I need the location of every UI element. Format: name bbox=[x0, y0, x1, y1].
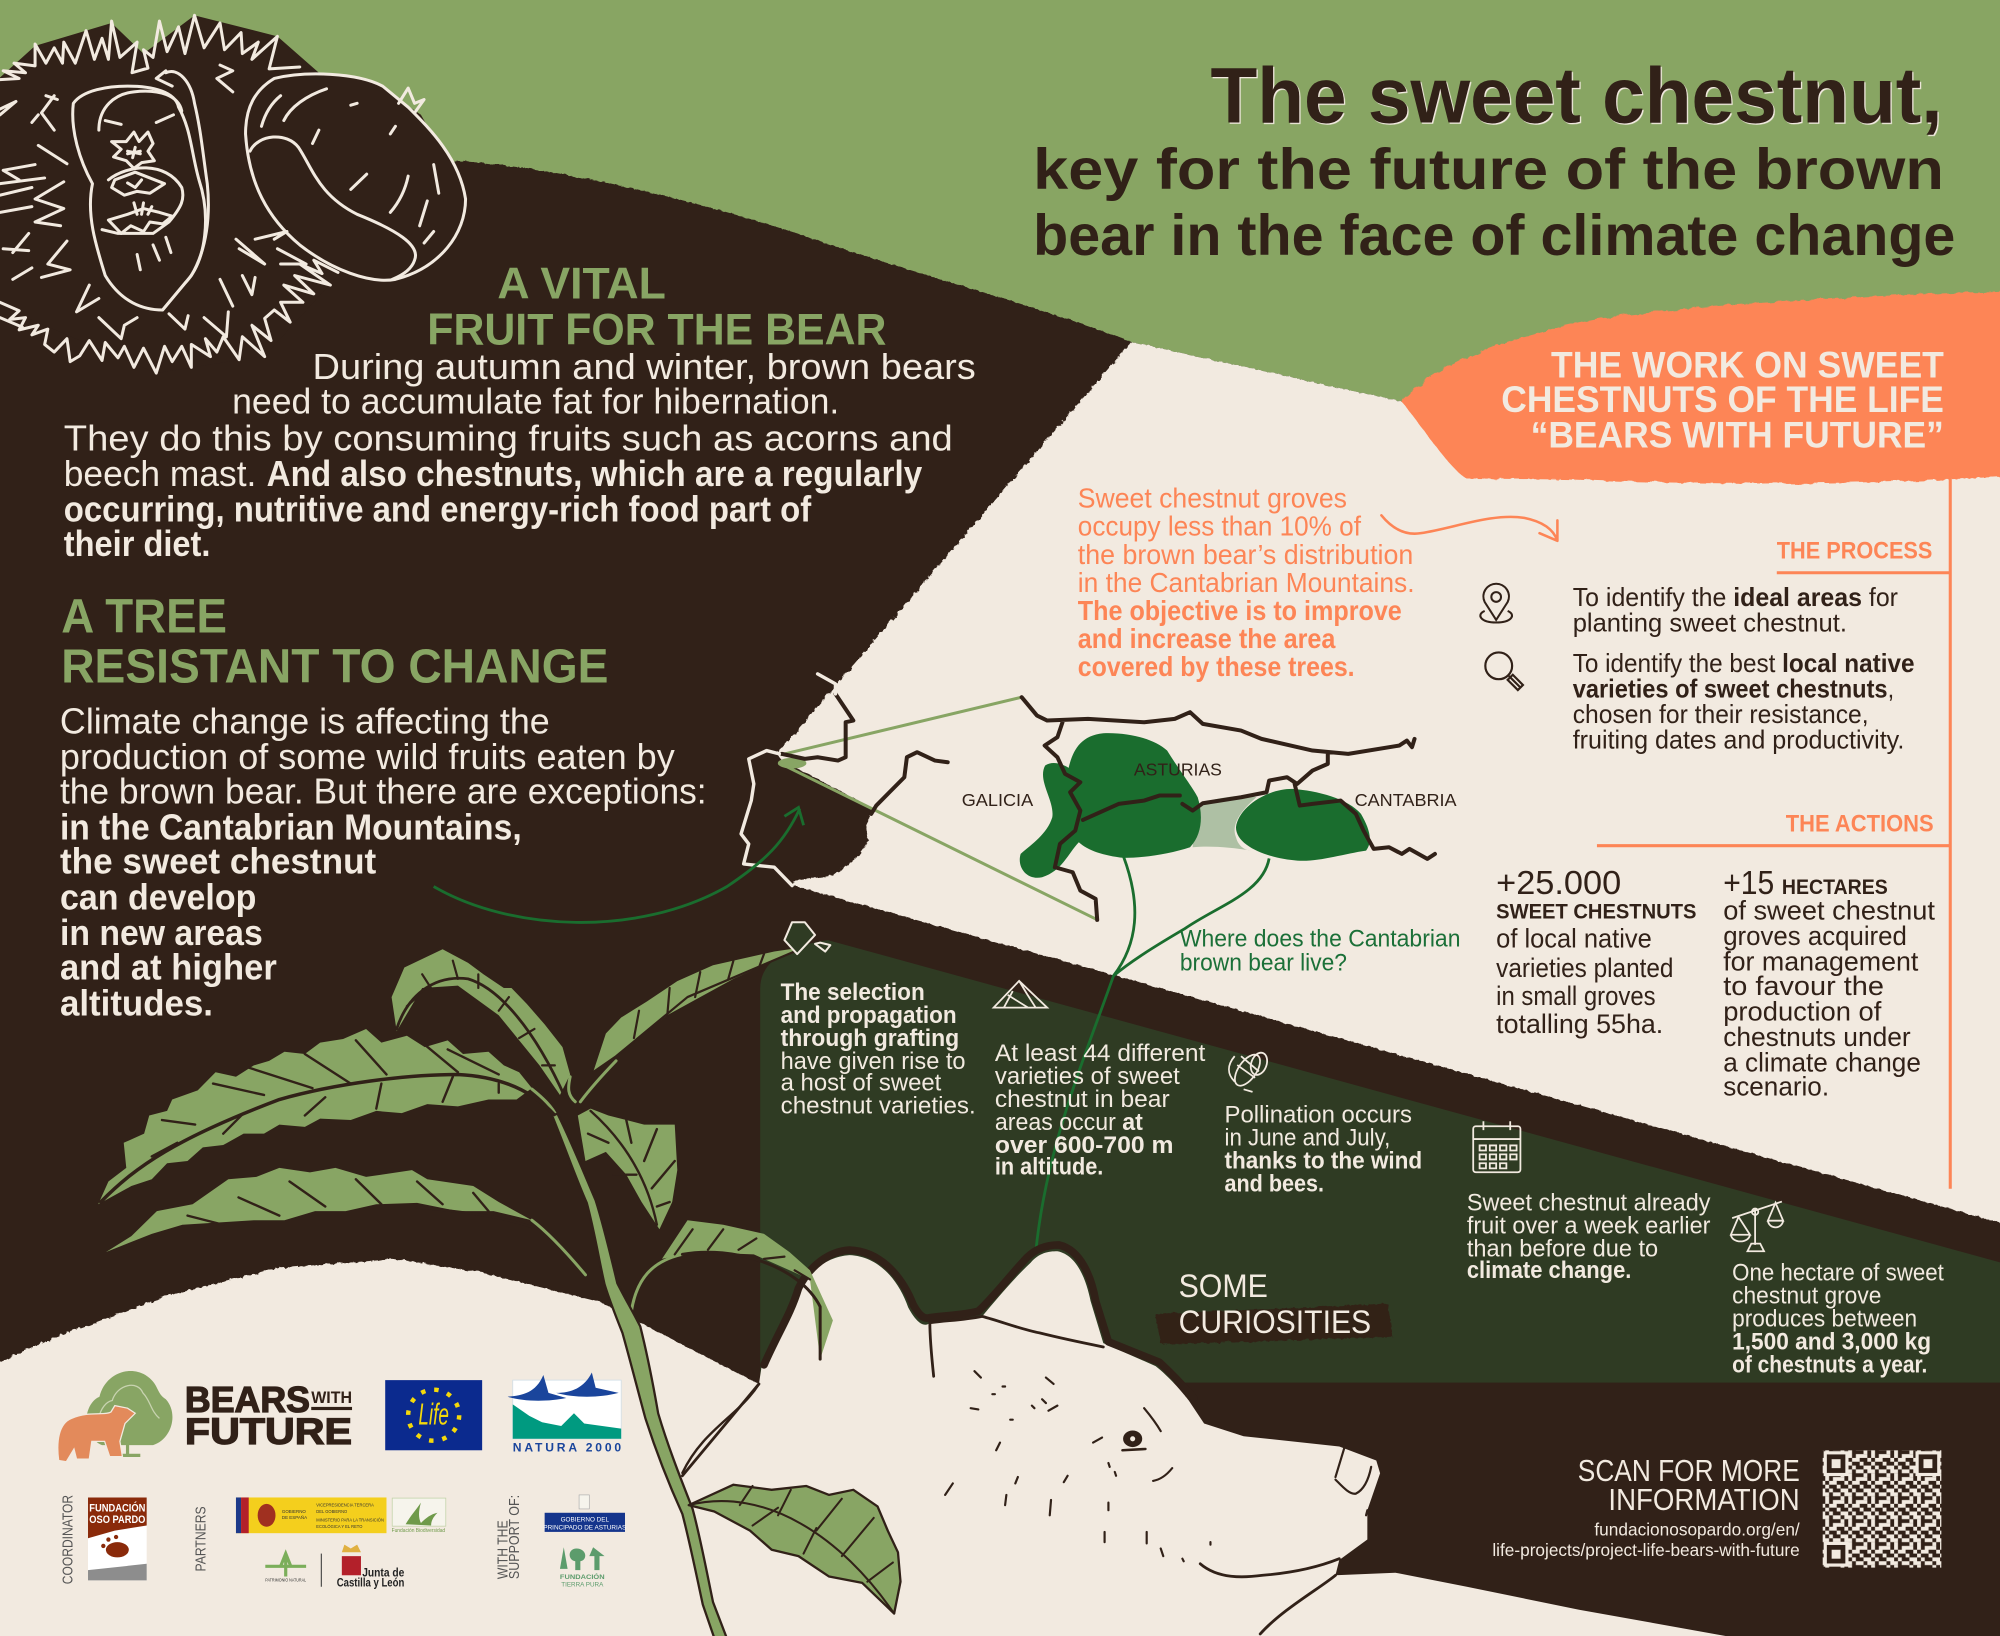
background: green top band bbox=[0, 0, 2000, 402]
heading: some curiosities: CURIOSITIES bbox=[1179, 1304, 1371, 1340]
label: coordinator: COORDINATOR bbox=[61, 1495, 77, 1584]
brush behind curiosities bbox=[1156, 1304, 1393, 1344]
heading: the process: THE PROCESS bbox=[1777, 538, 1932, 565]
heading: a tree resistant to change: A TREE bbox=[61, 590, 227, 644]
text block: selection and propagation: have given rise to bbox=[781, 1048, 966, 1075]
text block: pollination: in June and July, bbox=[1224, 1124, 1390, 1151]
illustration: bear bbox=[682, 1245, 1778, 1636]
icon: magnifying glass bbox=[1485, 652, 1523, 690]
text block: tree resistant body: in the Cantabrian Mountains, bbox=[60, 807, 522, 847]
text block: fruit a week earlier: Sweet chestnut already bbox=[1467, 1189, 1711, 1216]
heading: some curiosities bbox=[1179, 1268, 1371, 1340]
arrow: orange curve to process bbox=[1381, 515, 1557, 541]
text block: sweet chestnut groves orange: and increase the area bbox=[1078, 623, 1336, 654]
text block: process step two: chosen for their resistance, bbox=[1573, 701, 1869, 729]
text block: one hectare production bbox=[1732, 1260, 1944, 1378]
logo: fundacion tierra pura: TIERRA PURA bbox=[561, 1582, 604, 1589]
plant stem bbox=[552, 1114, 730, 1636]
text block: vital fruit body: need to accumulate fat for hibernation. bbox=[232, 381, 839, 421]
logo: fundacion biodiversidad bbox=[392, 1498, 446, 1534]
text block: vital fruit body bbox=[64, 347, 976, 564]
text block: scan for more information: INFORMATION bbox=[1608, 1483, 1800, 1517]
logo: bears with future: WITH bbox=[311, 1388, 352, 1407]
logo: patrimonio natural: PATRIMONIO NATURAL bbox=[265, 1578, 307, 1583]
leaf: lower right over bear bbox=[689, 1485, 901, 1614]
panel: orange heading blob bbox=[1402, 291, 2000, 483]
text block: sweet chestnut groves orange: The objective is to improve bbox=[1078, 595, 1402, 626]
orange rule frame bbox=[1597, 478, 1950, 1189]
text block: action 25.000 sweet chestnuts: in small groves bbox=[1496, 981, 1656, 1011]
text block: process step one: To identify the ideal areas for bbox=[1573, 584, 1898, 612]
heading: a vital fruit for the bear: A VITAL bbox=[497, 259, 666, 308]
text block: action 15 hectares: for management bbox=[1723, 947, 1919, 977]
text block: process step two: fruiting dates and productivity. bbox=[1573, 727, 1904, 755]
text block: pollination: thanks to the wind bbox=[1224, 1147, 1422, 1174]
text block: vital fruit body: During autumn and winter, brown bears bbox=[312, 347, 976, 387]
text block: one hectare production: produces between bbox=[1732, 1306, 1917, 1333]
text block: varieties and altitude: areas occur at bbox=[995, 1109, 1143, 1136]
text block: action 25.000 sweet chestnuts: varieties planted bbox=[1496, 953, 1673, 983]
logo: gobierno de espana: ECOLÓGICA Y EL RETO bbox=[316, 1524, 362, 1529]
icon: location pin bbox=[1480, 584, 1512, 622]
logo: fundacion oso pardo: FUNDACIÓN bbox=[89, 1501, 146, 1514]
qr code bbox=[1823, 1450, 1941, 1568]
text block: fruit a week earlier: than before due to bbox=[1467, 1235, 1658, 1262]
logo: fundacion tierra pura: FUNDACIÓN bbox=[560, 1572, 605, 1581]
text block: process step one bbox=[1573, 584, 1898, 637]
text block: one hectare production: 1,500 and 3,000 kg bbox=[1732, 1329, 1931, 1356]
text block: action 15 hectares: to favour the bbox=[1723, 971, 1884, 1001]
text block: action 15 hectares: production of bbox=[1723, 996, 1882, 1026]
text block: action 25.000 sweet chestnuts: of local native bbox=[1496, 924, 1652, 954]
heading: the actions: THE ACTIONS bbox=[1786, 811, 1934, 838]
heading: a vital fruit for the bear bbox=[427, 259, 886, 354]
text block: where does the bear live: Where does the Cantabrian bbox=[1180, 925, 1460, 952]
logo: natura 2000: NATURA 2000 bbox=[513, 1441, 621, 1455]
logo: gobierno de espana bbox=[236, 1497, 386, 1533]
text block: scan for more information: fundacionosopardo.org/en/ bbox=[1594, 1520, 1800, 1540]
text block: scan for more information: SCAN FOR MORE bbox=[1578, 1454, 1800, 1488]
logo: gobierno del principado de asturias: GOBIERNO DEL bbox=[561, 1517, 609, 1524]
logo: bears with future bbox=[58, 1371, 352, 1462]
text block: action 15 hectares: a climate change bbox=[1723, 1047, 1921, 1077]
text block: vital fruit body: their diet. bbox=[64, 524, 210, 564]
title: key for the future of the brown bbox=[1033, 138, 1944, 202]
label: galicia: GALICIA bbox=[962, 790, 1033, 810]
text block: varieties and altitude bbox=[995, 1040, 1206, 1181]
text block: selection and propagation: a host of sweet bbox=[781, 1070, 942, 1097]
text block: action 15 hectares bbox=[1723, 865, 1936, 1102]
map: bear distribution bbox=[741, 674, 1435, 920]
callout lines: from map to bear bbox=[1036, 857, 1269, 1253]
text block: pollination bbox=[1224, 1101, 1422, 1197]
logo: fundacion oso pardo: OSO PARDO bbox=[89, 1514, 145, 1526]
text block: process step two: To identify the best local native bbox=[1573, 650, 1915, 678]
icon: bee bbox=[1229, 1050, 1270, 1092]
text block: process step one: planting sweet chestnut. bbox=[1573, 609, 1847, 637]
text block: sweet chestnut groves orange: occupy less than 10% of bbox=[1078, 511, 1361, 542]
text block: sweet chestnut groves orange: covered by these trees. bbox=[1078, 651, 1355, 682]
text block: process step two: varieties of sweet chestnuts, bbox=[1573, 676, 1894, 704]
label: with the support of bbox=[496, 1495, 523, 1579]
heading: some curiosities: SOME bbox=[1179, 1268, 1268, 1304]
text block: tree resistant body: can develop bbox=[60, 877, 256, 917]
text block: varieties and altitude: in altitude. bbox=[995, 1154, 1103, 1181]
text block: where does the bear live: brown bear live? bbox=[1180, 950, 1347, 977]
logo: gobierno de espana: VICEPRESIDENCIA TERCERA bbox=[316, 1502, 374, 1507]
icon: watering can bbox=[784, 922, 830, 954]
text block: action 25.000 sweet chestnuts: SWEET CHESTNUTS bbox=[1496, 900, 1696, 923]
text block: varieties and altitude: At least 44 different bbox=[995, 1040, 1206, 1067]
text block: scan for more information bbox=[1492, 1454, 1800, 1560]
text block: pollination: Pollination occurs bbox=[1224, 1101, 1412, 1128]
logo: gobierno de espana: DE ESPAÑA bbox=[282, 1514, 307, 1520]
logo: junta de castilla y leon: Junta de bbox=[362, 1566, 405, 1580]
text block: selection and propagation: and propagation bbox=[781, 1002, 957, 1029]
text block: pollination: and bees. bbox=[1224, 1170, 1324, 1197]
logo: life: Life bbox=[418, 1398, 449, 1432]
logo: fundacion tierra pura bbox=[560, 1547, 605, 1589]
text block: action 15 hectares: scenario. bbox=[1723, 1072, 1829, 1102]
label: asturias: ASTURIAS bbox=[1134, 760, 1222, 780]
heading: the work on sweet chestnuts: CHESTNUTS OF THE LIFE bbox=[1501, 379, 1944, 420]
icon: calendar bbox=[1473, 1121, 1520, 1172]
text block: vital fruit body: And also chestnuts, which are a regularly bbox=[267, 454, 922, 494]
text block: action 15 hectares: of sweet chestnut bbox=[1723, 896, 1936, 926]
logo: natura 2000 bbox=[508, 1372, 621, 1455]
logo: fundacion biodiversidad: Fundación Biodiversidad bbox=[392, 1528, 445, 1534]
text block: selection and propagation: chestnut varieties. bbox=[781, 1093, 976, 1120]
title: bear in the face of climate change bbox=[1033, 204, 1955, 268]
heading: the work on sweet chestnuts: “BEARS WITH FUTURE” bbox=[1531, 415, 1944, 456]
text block: action 15 hectares: +15 bbox=[1723, 865, 1774, 902]
text block: tree resistant body: Climate change is affecting the bbox=[60, 701, 550, 741]
text block: action 15 hectares: HECTARES bbox=[1782, 876, 1888, 899]
text block: selection and propagation bbox=[781, 979, 976, 1120]
text block: action 25.000 sweet chestnuts bbox=[1496, 865, 1696, 1039]
text block: fruit a week earlier bbox=[1467, 1189, 1711, 1284]
text block: process step two bbox=[1573, 650, 1915, 755]
heading: the work on sweet chestnuts bbox=[1501, 345, 1944, 456]
text block: one hectare production: chestnut grove bbox=[1732, 1283, 1881, 1310]
text block: tree resistant body: the sweet chestnut bbox=[60, 842, 376, 882]
illustration: chestnut burr and nut bbox=[0, 15, 469, 373]
text block: varieties and altitude: over 600-700 m bbox=[995, 1132, 1173, 1159]
text block: selection and propagation: The selection bbox=[781, 979, 925, 1006]
text block: tree resistant body: production of some wild fruits eaten by bbox=[60, 737, 675, 777]
text block: tree resistant body: the brown bear. But there are exceptions: bbox=[60, 772, 707, 812]
heading: a vital fruit for the bear: FRUIT FOR THE BEAR bbox=[427, 305, 886, 354]
text block: selection and propagation: through grafting bbox=[781, 1025, 959, 1052]
background: cream panel with map area bbox=[777, 296, 2000, 1227]
text block: tree resistant body: in new areas bbox=[60, 913, 263, 953]
logo: junta de castilla y leon: Castilla y León bbox=[337, 1576, 404, 1590]
text block: one hectare production: of chestnuts a year. bbox=[1732, 1351, 1927, 1378]
text block: vital fruit body: occurring, nutritive and energy-rich food part of bbox=[64, 490, 811, 530]
text block: varieties and altitude: varieties of sweet bbox=[995, 1063, 1180, 1090]
logo: fundacion oso pardo bbox=[88, 1497, 147, 1580]
text block: tree resistant body: and at higher bbox=[60, 948, 277, 988]
heading: the work on sweet chestnuts: THE WORK ON SWEET bbox=[1551, 345, 1944, 386]
panel: dark green curiosities band bbox=[760, 940, 2000, 1383]
label: partners: PARTNERS bbox=[193, 1506, 209, 1571]
arrow: green to iberia bbox=[434, 807, 804, 922]
text block: varieties and altitude: chestnut in bear bbox=[995, 1086, 1170, 1113]
logo: gobierno de espana: DEL GOBIERNO bbox=[316, 1509, 347, 1514]
title: The sweet chestnut, bbox=[1210, 50, 1943, 139]
text block: tree resistant body bbox=[60, 701, 707, 1023]
icon: scales bbox=[1731, 1202, 1783, 1251]
label: cantabria: CANTABRIA bbox=[1355, 790, 1457, 810]
text block: action 25.000 sweet chestnuts: totalling 55ha. bbox=[1496, 1009, 1663, 1039]
logo: bears with future: FUTURE bbox=[185, 1411, 352, 1452]
text block: where does the bear live bbox=[1180, 925, 1460, 977]
text block: sweet chestnut groves orange bbox=[1078, 483, 1415, 682]
text block: fruit a week earlier: fruit over a week earlier bbox=[1467, 1212, 1710, 1239]
text block: sweet chestnut groves orange: Sweet chestnut groves bbox=[1078, 483, 1347, 514]
text block: action 15 hectares: groves acquired bbox=[1723, 921, 1907, 951]
text block: action 25.000 sweet chestnuts: +25.000 bbox=[1496, 865, 1621, 902]
text block: scan for more information: life-projects/project-life-bears-with-future bbox=[1492, 1540, 1800, 1560]
logo: gobierno del principado de asturias: PRINCIPADO DE ASTURIAS bbox=[543, 1524, 626, 1531]
logo: junta de castilla y leon bbox=[337, 1545, 405, 1590]
text block: fruit a week earlier: climate change. bbox=[1467, 1257, 1631, 1284]
label: with the support of: WITH THE bbox=[496, 1520, 512, 1579]
logo: patrimonio natural bbox=[265, 1554, 322, 1587]
background: cream hill bottom left bbox=[0, 1259, 816, 1636]
logo: gobierno del principado de asturias bbox=[543, 1495, 626, 1532]
label: with the support of: SUPPORT OF: bbox=[507, 1495, 523, 1579]
text block: one hectare production: One hectare of sweet bbox=[1732, 1260, 1944, 1287]
illustration: chestnut plant leaves and stem bbox=[98, 947, 833, 1473]
icon: mountains bbox=[994, 981, 1047, 1008]
logo: life bbox=[385, 1380, 482, 1450]
logo: gobierno de espana: GOBIERNO bbox=[282, 1509, 306, 1514]
heading: a tree resistant to change bbox=[61, 590, 608, 693]
text block: tree resistant body: altitudes. bbox=[60, 983, 213, 1023]
text block: vital fruit body: beech mast. bbox=[64, 454, 256, 494]
title bbox=[1033, 50, 1955, 268]
text block: sweet chestnut groves orange: in the Cantabrian Mountains. bbox=[1078, 567, 1415, 598]
text block: sweet chestnut groves orange: the brown bear’s distribution bbox=[1078, 539, 1413, 570]
logo: bears with future: BEARS bbox=[185, 1380, 310, 1420]
logo: gobierno de espana: MINISTERIO PARA LA TRANSICIÓN bbox=[316, 1518, 384, 1523]
text block: action 15 hectares: chestnuts under bbox=[1723, 1022, 1911, 1052]
heading: a tree resistant to change: RESISTANT TO CHANGE bbox=[61, 639, 608, 693]
text block: vital fruit body: They do this by consuming fruits such as acorns and bbox=[64, 418, 953, 458]
